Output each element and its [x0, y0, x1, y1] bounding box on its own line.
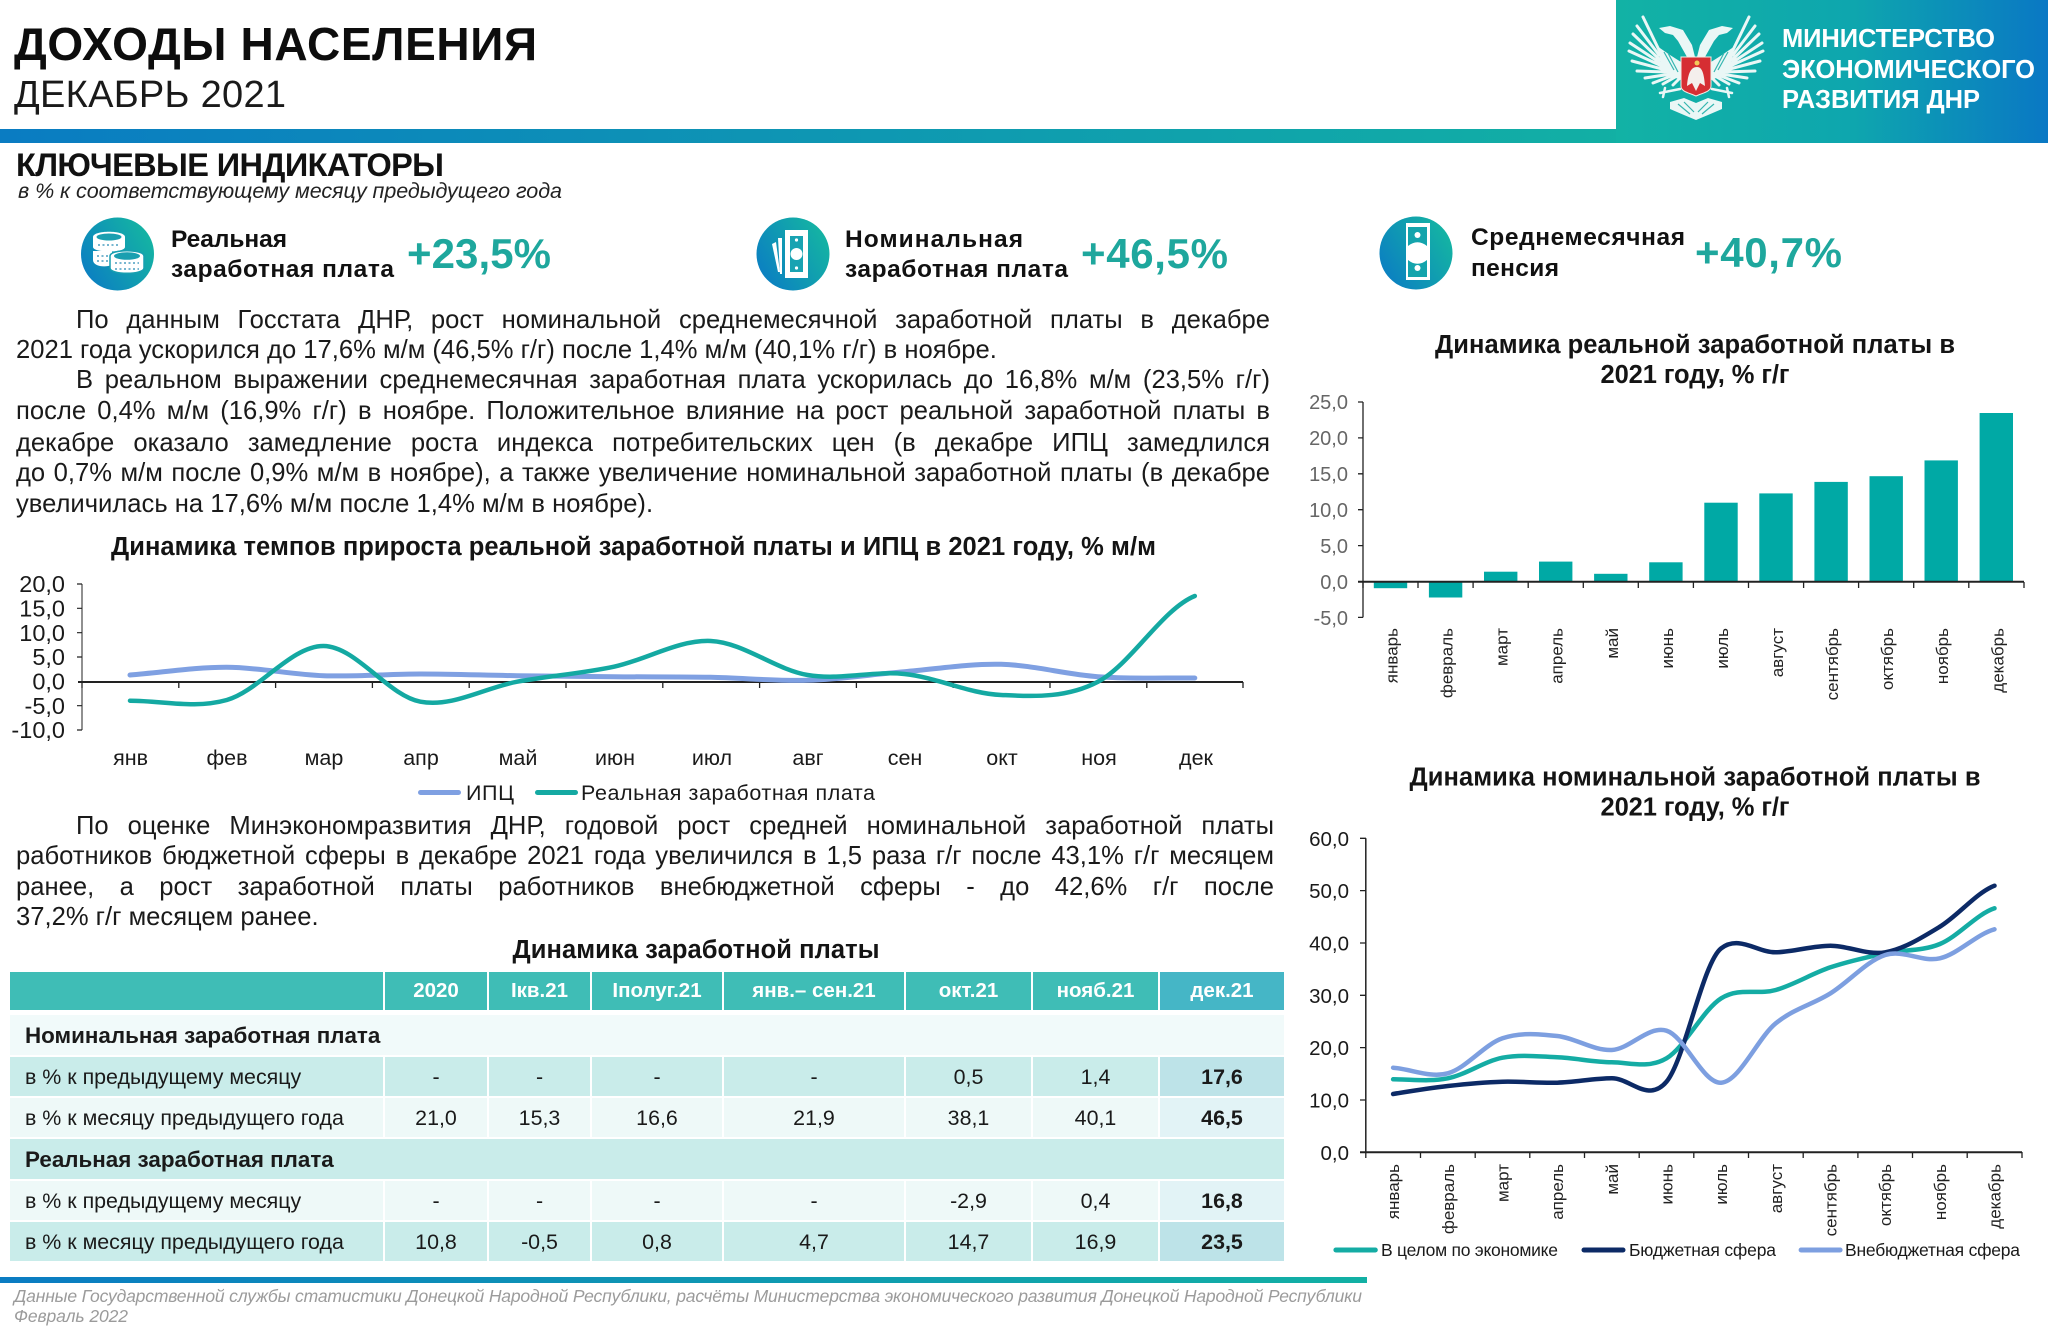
month labels: ноябрь: [1933, 628, 1952, 684]
section heading: key indicators: КЛЮЧЕВЫЕ ИНДИКАТОРЫ: [16, 147, 444, 183]
y axis labels: 5,0: [32, 644, 65, 670]
kpi: real wage: заработная плата: [171, 256, 394, 283]
icon: vertical banknote: [1380, 216, 1452, 290]
chart title: Динамика темпов прироста реальной заработной платы и ИПЦ в 2021 году, % м/м: [111, 533, 1156, 561]
month labels: январь: [1382, 628, 1402, 683]
chart: real wage yoy bars: [1309, 331, 2024, 700]
header gradient bar: [0, 129, 1630, 143]
kpi: nominal wage: [756, 218, 1228, 290]
kpi: nominal wage: +46,5%: [1081, 230, 1228, 277]
kpi: real wage: +23,5%: [407, 230, 551, 277]
line: budget sector: [1393, 886, 1994, 1094]
chart: real wage and CPI monthly growth: [11, 533, 1243, 805]
table: wage dynamics: 21,0: [415, 1106, 457, 1130]
x axis labels: мар: [305, 746, 343, 770]
y axis labels: 40,0: [1309, 932, 1349, 956]
ministry name: [1782, 25, 2035, 114]
section heading: key indicators: в % к соответствующему месяцу предыдущего года: [18, 179, 562, 203]
table: wage dynamics: -: [536, 1189, 543, 1213]
legend: [418, 781, 875, 805]
table: wage dynamics: -: [432, 1189, 440, 1213]
table: wage dynamics: 16,9: [1075, 1230, 1116, 1254]
month labels: [1384, 1164, 2004, 1236]
month labels: ноябрь: [1931, 1164, 1950, 1220]
legend: Реальная заработная плата: [581, 781, 875, 805]
text block: wage overview: В реальном выражении среднемесячная заработная плата ускорилась до 16,8% м/м (23,5% г/г): [76, 366, 1270, 394]
bars: [1374, 413, 2013, 598]
table: wage dynamics: янв.– сен.21: [752, 979, 876, 1002]
y axis labels: 10,0: [1309, 1090, 1349, 1112]
table: wage dynamics: в % к предыдущему месяцу: [25, 1065, 301, 1089]
month labels: август: [1767, 1164, 1786, 1213]
footer bar: [0, 1277, 1367, 1283]
x axis labels: янв: [113, 746, 148, 770]
table: wage dynamics: -: [810, 1189, 818, 1213]
text block: budget and non-budget sector estimate: работников бюджетной сферы в декабре 2021 года увеличился в 1,5 раза г/г после 43,1% г/г месяцем: [16, 842, 1274, 870]
text block: wage overview: до 0,7% м/м после 0,9% м/м в ноябре), а также увеличение номинальной заработной платы (в декабре: [16, 459, 1270, 487]
table: wage dynamics: [10, 972, 1284, 1261]
axes: [77, 584, 1243, 730]
y axis labels: 10,0: [1309, 500, 1348, 522]
table: wage dynamics: 10,8: [415, 1230, 457, 1254]
month labels: [1382, 628, 2007, 700]
table: wage dynamics: в % к месяцу предыдущего года: [25, 1106, 344, 1130]
legend: ИПЦ: [466, 781, 514, 805]
y axis labels: 0,0: [32, 668, 65, 694]
footer source note: [12, 1286, 1362, 1326]
y axis labels: 15,0: [19, 596, 65, 622]
y axis labels: -5,0: [24, 693, 65, 719]
x axis labels: апр: [403, 746, 439, 770]
legend: Внебюджетная сфера: [1845, 1240, 2020, 1260]
table: wage dynamics: 21,9: [793, 1106, 835, 1130]
month labels: сентябрь: [1823, 628, 1842, 700]
header title: [14, 18, 537, 116]
chart: nominal wage yoy lines: [1309, 764, 2022, 1260]
table: wage dynamics: Реальная заработная плата: [25, 1147, 334, 1172]
chart title: [1435, 331, 1955, 389]
ministry banner: [1616, 0, 2048, 143]
text block: wage overview: По данным Госстата ДНР, рост номинальной среднемесячной заработной платы в декабре: [76, 306, 1270, 334]
ministry name: РАЗВИТИЯ ДНР: [1782, 86, 1980, 114]
kpi: nominal wage: Номинальная: [845, 226, 1023, 253]
x axis labels: май: [499, 746, 537, 770]
x axis labels: авг: [792, 746, 824, 770]
table: wage dynamics: окт.21: [939, 979, 998, 1002]
icon: double-headed eagle emblem: [1629, 17, 1763, 120]
month labels: октябрь: [1876, 1164, 1895, 1226]
month labels: март: [1494, 1164, 1512, 1202]
table: wage dynamics: 4,7: [799, 1230, 829, 1254]
month labels: февраль: [1439, 1164, 1458, 1234]
y axis labels: 25,0: [1309, 392, 1348, 414]
kpi: real wage: [81, 218, 551, 290]
x axis labels: окт: [986, 746, 1018, 770]
y axis labels: -10,0: [11, 717, 65, 743]
y axis labels: 5,0: [1320, 536, 1348, 558]
chart title: Динамика реальной заработной платы в: [1435, 331, 1955, 359]
table: wage dynamics: в % к предыдущему месяцу: [25, 1189, 301, 1213]
table: wage dynamics: 14,7: [948, 1230, 989, 1254]
month labels: декабрь: [1986, 1164, 2004, 1229]
table: wage dynamics: дек.21: [1190, 979, 1254, 1002]
table: wage dynamics: в % к месяцу предыдущего года: [25, 1230, 344, 1254]
chart title: [1410, 764, 1980, 822]
kpi: pension: пенсия: [1471, 255, 1559, 282]
y axis labels: 20,0: [19, 571, 65, 597]
line: non-budget sector: [1393, 929, 1994, 1083]
kpi: pension: +40,7%: [1695, 229, 1842, 276]
text block: wage overview: декабре оказало замедление роста индекса потребительских цен (в декабре ИПЦ замедлился: [16, 429, 1270, 457]
icon: coins: [81, 218, 154, 290]
table title: Динамика заработной платы: [512, 936, 880, 964]
text block: budget and non-budget sector estimate: 37,2% г/г месяцем ранее.: [16, 903, 319, 931]
month labels: май: [1603, 1164, 1622, 1195]
chart title: 2021 году, % г/г: [1600, 361, 1790, 389]
x axis labels: дек: [1179, 746, 1214, 770]
y axis labels: [11, 571, 65, 743]
icon: banknotes: [756, 218, 830, 290]
axes: [1360, 838, 2022, 1158]
line: CPI: [130, 664, 1195, 680]
text block: wage overview: после 0,4% м/м (16,9% г/г) в ноябре. Положительное влияние на рост реальной заработной платы в: [16, 397, 1270, 425]
month labels: июль: [1713, 628, 1732, 669]
month labels: январь: [1384, 1164, 1403, 1219]
table: wage dynamics: 16,8: [1201, 1189, 1243, 1213]
ministry name: МИНИСТЕРСТВО: [1782, 25, 1995, 53]
table: wage dynamics: -: [536, 1065, 543, 1089]
ministry name: ЭКОНОМИЧЕСКОГО: [1782, 56, 2035, 84]
y axis labels: 0,0: [1320, 572, 1348, 594]
line: economy total: [1393, 908, 1994, 1080]
table: wage dynamics: -: [653, 1065, 661, 1089]
header title: ДОХОДЫ НАСЕЛЕНИЯ: [14, 18, 537, 70]
month labels: апрель: [1548, 1164, 1567, 1220]
chart title: 2021 году, % г/г: [1600, 794, 1790, 822]
table: wage dynamics: 46,5: [1201, 1106, 1243, 1130]
kpi: pension: [1380, 216, 1842, 290]
y axis labels: 20,0: [1309, 1037, 1349, 1060]
y axis labels: [1309, 828, 1349, 1165]
table: wage dynamics: Iполуг.21: [612, 979, 702, 1002]
y axis labels: 10,0: [19, 620, 65, 646]
table: wage dynamics: -2,9: [950, 1189, 987, 1213]
text block: budget and non-budget sector estimate: По оценке Минэкономразвития ДНР, годовой рост средней номинальной заработной платы: [76, 812, 1274, 840]
y axis labels: 50,0: [1309, 880, 1349, 903]
x axis labels: ноя: [1081, 746, 1117, 770]
month labels: июль: [1712, 1164, 1731, 1205]
y axis labels: 60,0: [1309, 828, 1349, 851]
table: wage dynamics: -0,5: [521, 1230, 558, 1254]
month labels: май: [1603, 628, 1622, 659]
x axis labels: [113, 746, 1214, 770]
month labels: сентябрь: [1822, 1164, 1840, 1236]
table: wage dynamics: 38,1: [948, 1106, 989, 1130]
chart title: Динамика номинальной заработной платы в: [1410, 764, 1980, 792]
table: wage dynamics: 17,6: [1201, 1065, 1243, 1089]
table: wage dynamics: Iкв.21: [511, 979, 568, 1002]
y axis labels: 30,0: [1309, 985, 1349, 1008]
month labels: март: [1493, 628, 1512, 666]
table: wage dynamics: нояб.21: [1057, 979, 1134, 1002]
table: wage dynamics: -: [653, 1189, 661, 1213]
month labels: апрель: [1548, 628, 1567, 684]
text block: wage overview: увеличилась на 17,6% м/м после 1,4% м/м в ноябре).: [16, 490, 653, 518]
text block: budget and non-budget sector estimate: ранее, а рост заработной платы работников внебюджетной сферы - до 42,6% г/г после: [16, 873, 1274, 901]
legend: [1333, 1240, 2020, 1260]
footer source note: Февраль 2022: [14, 1306, 128, 1326]
x axis labels: фев: [206, 746, 248, 770]
kpi: nominal wage: заработная плата: [845, 256, 1068, 283]
text block: wage overview: 2021 года ускорился до 17,6% м/м (46,5% г/г) после 1,4% м/м (40,1% г/г) в ноябре.: [16, 336, 997, 364]
legend: Бюджетная сфера: [1629, 1240, 1776, 1260]
table: wage dynamics: 1,4: [1081, 1065, 1110, 1089]
table: wage dynamics: -: [432, 1065, 440, 1089]
month labels: июнь: [1658, 1164, 1676, 1204]
y axis labels: [1309, 392, 1348, 630]
month labels: август: [1768, 628, 1787, 677]
y axis labels: 15,0: [1309, 464, 1348, 486]
table: wage dynamics: -: [810, 1065, 818, 1089]
table: wage dynamics: 23,5: [1201, 1230, 1243, 1254]
y axis labels: 0,0: [1320, 1142, 1349, 1165]
table: wage dynamics: Номинальная заработная плата: [25, 1023, 380, 1048]
table: wage dynamics: 16,6: [636, 1106, 678, 1130]
table: wage dynamics: 15,3: [519, 1106, 560, 1130]
table: wage dynamics: 0,8: [642, 1230, 672, 1254]
section heading: key indicators: [16, 147, 562, 203]
legend: В целом по экономике: [1381, 1240, 1558, 1260]
month labels: октябрь: [1878, 628, 1897, 690]
footer source note: Данные Государственной службы статистики Донецкой Народной Республики, расчёты Министерства экономического развития Донецкой Народной Республики: [12, 1286, 1362, 1306]
y axis labels: 20,0: [1309, 428, 1348, 450]
month labels: июнь: [1658, 628, 1677, 668]
table: wage dynamics: 0,4: [1081, 1189, 1110, 1213]
x axis labels: сен: [888, 746, 922, 770]
month labels: февраль: [1438, 628, 1457, 698]
table: wage dynamics: 2020: [413, 979, 459, 1002]
x axis labels: июн: [595, 746, 635, 770]
y axis labels: -5,0: [1314, 608, 1348, 630]
header title: ДЕКАБРЬ 2021: [14, 74, 286, 116]
line: real wage: [130, 596, 1195, 704]
table: wage dynamics: 40,1: [1075, 1106, 1116, 1130]
x axis labels: июл: [692, 746, 732, 770]
axes: [1358, 402, 2024, 617]
table: wage dynamics: 0,5: [954, 1065, 983, 1089]
kpi: pension: Среднемесячная: [1471, 224, 1685, 251]
month labels: декабрь: [1988, 628, 2007, 693]
kpi: real wage: Реальная: [171, 226, 287, 253]
